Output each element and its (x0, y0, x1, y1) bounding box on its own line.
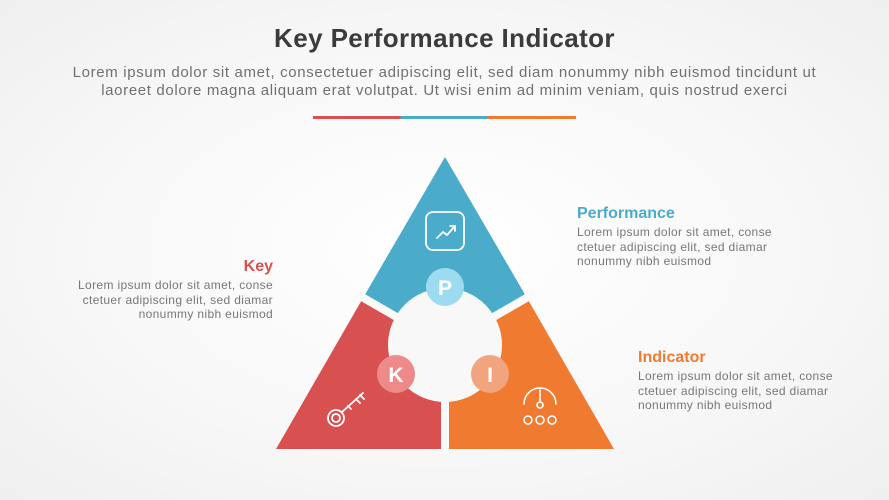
text: indicator: nonummy nibh euismod (638, 398, 772, 412)
badge I (471, 355, 509, 393)
subtitle: laoreet dolore magna aliquam erat volutpat. Ut wisi enim ad minim veniam, quis nostrud exerci (101, 82, 788, 99)
icon: chart (426, 212, 464, 250)
text: indicator: ctetuer adipiscing elit, sed diamar (638, 384, 828, 398)
badge P: P (438, 277, 452, 300)
segment: key (276, 298, 445, 449)
badge K: K (388, 364, 404, 387)
text: key: ctetuer adipiscing elit, sed diamar (83, 292, 273, 306)
badge I: I (487, 364, 493, 387)
text: key (78, 258, 273, 321)
badge K (377, 355, 415, 393)
text: key: nonummy nibh euismod (139, 307, 273, 321)
text: indicator: Indicator (638, 349, 706, 366)
text: indicator (638, 349, 833, 412)
icon: key (328, 393, 364, 426)
text: key: Key (244, 258, 273, 275)
segment: performance (363, 157, 527, 345)
text: performance: Lorem ipsum dolor sit amet, conse (577, 225, 772, 239)
text: key: Lorem ipsum dolor sit amet, conse (78, 278, 273, 292)
subtitle: Lorem ipsum dolor sit amet, consectetuer adipiscing elit, sed diam nonummy nibh euismod tincidunt ut (73, 64, 816, 81)
icon: gauge (524, 388, 556, 424)
title: Key Performance Indicator (274, 23, 615, 53)
text: performance: nonummy nibh euismod (577, 254, 711, 268)
text: indicator: Lorem ipsum dolor sit amet, conse (638, 369, 833, 383)
badge P (426, 268, 464, 306)
text: performance: Performance (577, 205, 675, 222)
header underline (313, 116, 576, 119)
text: performance (577, 205, 772, 268)
text: performance: ctetuer adipiscing elit, sed diamar (577, 240, 767, 254)
subtitle (73, 64, 816, 99)
segment: indicator (445, 298, 614, 449)
